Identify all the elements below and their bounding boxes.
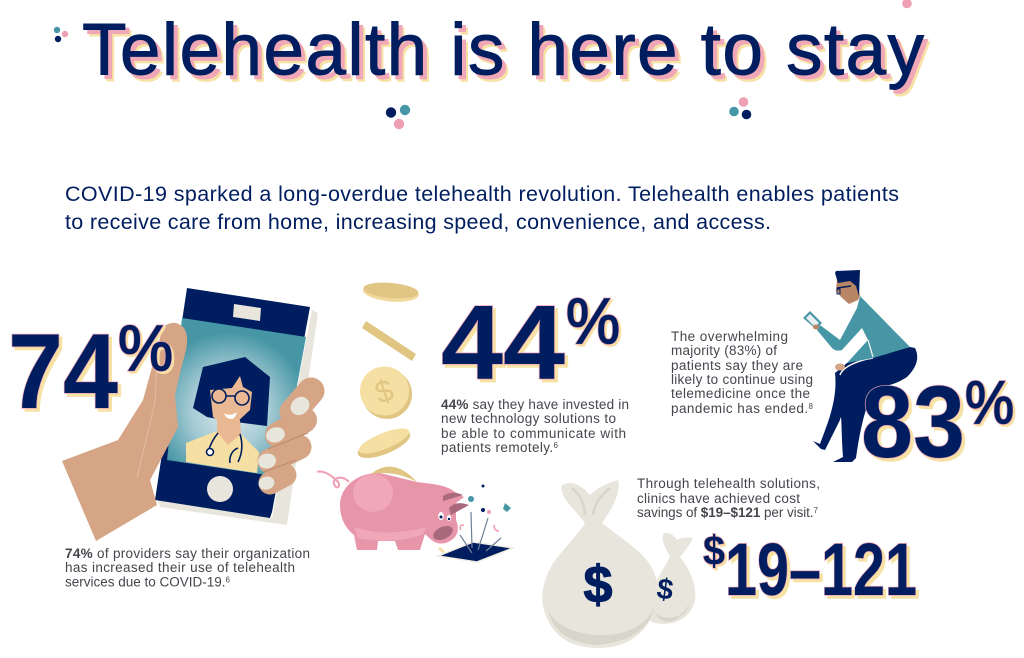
text: 44% invested: be able to communicate with [441, 426, 626, 441]
text: cost savings: savings of $19–$121 per visit. [637, 505, 814, 520]
stat: 74% [8, 311, 175, 434]
text: cost savings: Through telehealth solutions, [637, 476, 820, 491]
stat: 83%: 83 [861, 365, 965, 479]
text: 83% of patients: telemedicine once the [671, 386, 810, 401]
stat: 44%: % [566, 285, 620, 357]
text: 74% of providers: 74% of providers say their organization [65, 546, 310, 561]
stat: 44%: % [568, 287, 622, 359]
text: cost savings [637, 476, 820, 520]
text: 83% of patients: likely to continue using [671, 372, 813, 387]
stat: 44%: 44 [444, 287, 568, 405]
text: 83% of patients: majority (83%) of [671, 343, 777, 358]
text: cost savings: 7 [814, 506, 819, 515]
illustration: money bags: $ [584, 556, 613, 614]
text: 83% of patients: The overwhelming [671, 329, 788, 344]
text: 83% of patients: 8 [809, 402, 814, 411]
text: 74% of providers: services due to COVID-19. [65, 574, 226, 590]
stat: 83%: % [965, 369, 1014, 436]
text: 83% of patients: patients say they are [671, 358, 803, 373]
illustration: falling coins [354, 281, 420, 464]
intro text [65, 182, 899, 234]
stat: 74%: % [118, 312, 173, 384]
decorative dots: right [729, 97, 751, 119]
stat: 74%: 74 [11, 314, 121, 434]
stat: $19-121 [703, 527, 920, 614]
text: 44% invested: new technology solutions to [441, 411, 616, 426]
text: 83% of patients: pandemic has ended. [671, 401, 808, 416]
text: 74% of providers [65, 546, 310, 590]
text: 44% invested: 6 [554, 441, 559, 450]
text: cost savings: clinics have achieved cost [637, 491, 800, 506]
stat: 74%: % [120, 314, 175, 386]
stat: $19-121: $ [703, 527, 725, 574]
illustration: hand holding phone with doctor [62, 288, 318, 541]
text: 74% of providers: has increased their use of telehealth [65, 560, 295, 575]
intro text: COVID-19 sparked a long-overdue telehealth revolution. Telehealth enables patients [65, 182, 899, 206]
intro text: to receive care from home, increasing speed, convenience, and access. [65, 210, 771, 234]
illustration: falling coins: $ [371, 372, 398, 411]
decorative dots: centre [386, 105, 410, 129]
illustration: money bags [542, 480, 695, 648]
decorative dot: top right [902, 0, 912, 8]
stat: 74%: % [118, 312, 173, 384]
stat: $19-121: 19–121 [725, 528, 917, 611]
illustration: money bags: $ [655, 573, 675, 607]
text: 44% invested [441, 397, 629, 455]
illustration: piggy bank with tablet [317, 467, 513, 562]
decorative dots: top left [54, 27, 68, 42]
stat: 83%: 83 [864, 368, 968, 482]
title: Telehealth is here to stay [82, 10, 924, 90]
text: 44% invested: 44% say they have invested in [441, 397, 629, 412]
stat: 83%: % [967, 371, 1016, 438]
stat: 44% [441, 284, 622, 405]
stat: 44%: % [566, 285, 620, 357]
stat: 74%: 74 [8, 311, 118, 431]
text: 74% of providers: 6 [226, 576, 231, 584]
stat: 83%: % [965, 369, 1014, 436]
stat: 44%: 44 [441, 284, 565, 402]
illustration: seated man with phone [803, 270, 917, 462]
title: Telehealth is here to stay [86, 14, 928, 94]
text: 44% invested: patients remotely. [441, 440, 553, 455]
title: Telehealth is here to stay [88, 16, 930, 97]
text: 83% of patients [671, 329, 814, 416]
stat: $19-121: 19–121 [728, 531, 920, 614]
stat: $19-121: $ [705, 529, 727, 576]
